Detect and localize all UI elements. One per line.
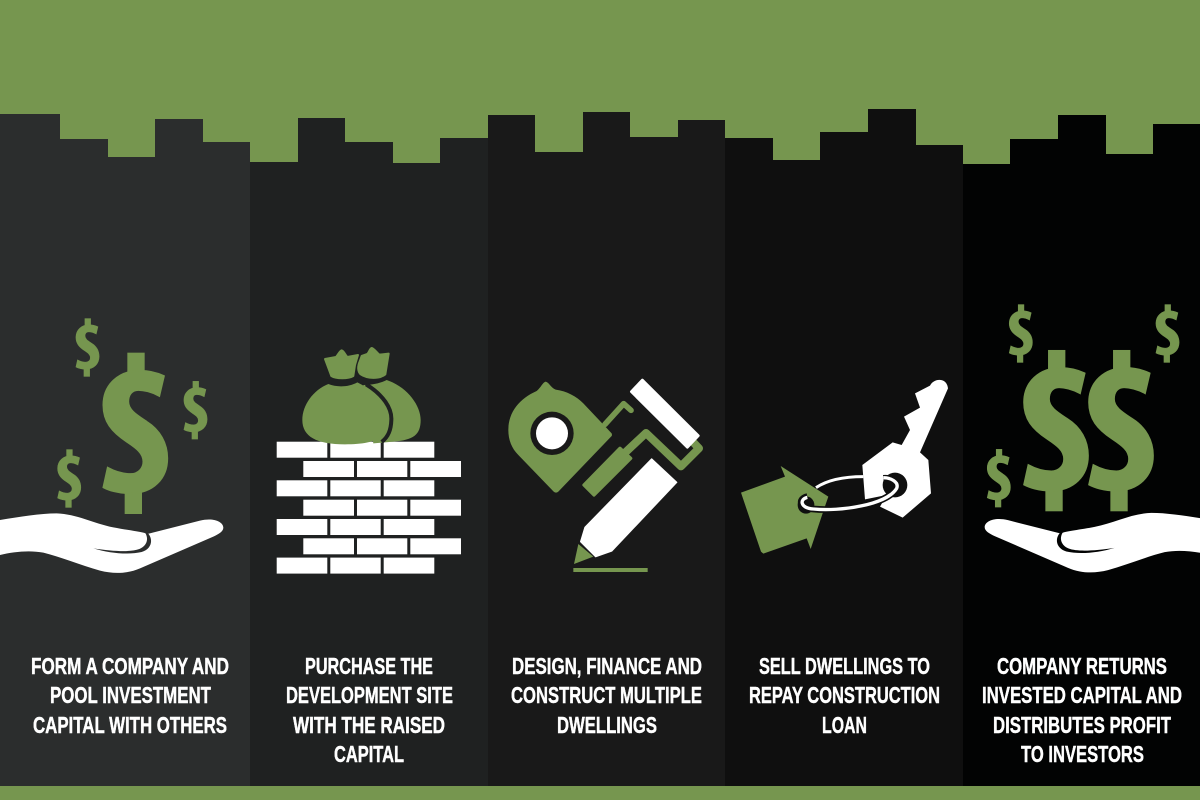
skyline column 4: [725, 109, 963, 800]
caption: step 1: [31, 653, 229, 738]
panel: step 5 return capital: [963, 115, 1200, 800]
caption: step 3: DWELLINGS: [557, 712, 657, 738]
skyline column 1: [0, 114, 250, 800]
caption: step 5: TO INVESTORS: [1021, 741, 1144, 767]
bottom green band: [0, 786, 1200, 800]
icon: tape measure, roller and pencil: [508, 380, 699, 572]
caption: step 2: DEVELOPMENT SITE: [286, 682, 453, 708]
panel: step 4 sell dwellings: [725, 109, 963, 800]
caption: step 2: CAPITAL: [334, 741, 404, 767]
icon: double dollars over open hand: [985, 304, 1200, 572]
caption: step 3: CONSTRUCT MULTIPLE: [511, 682, 702, 708]
skyline column 3: [488, 112, 725, 800]
caption: step 4: REPAY CONSTRUCTION: [749, 682, 940, 708]
caption: step 2: PURCHASE THE: [305, 653, 433, 679]
panel: step 2 purchase site: [250, 118, 488, 800]
caption: step 1: FORM A COMPANY AND: [31, 653, 229, 679]
icon: house key fob and key: [741, 380, 948, 554]
icon: money bags: [302, 348, 421, 444]
caption: step 4: LOAN: [822, 712, 867, 738]
caption: step 1: POOL INVESTMENT: [50, 682, 211, 708]
skyline column 5: [963, 115, 1200, 800]
caption: step 5: [982, 653, 1182, 767]
icon: brick wall: [277, 442, 461, 574]
caption: step 2: WITH THE RAISED: [293, 712, 445, 738]
paint roller: [584, 380, 699, 495]
icon: dollars over open hand: [0, 318, 223, 573]
caption: step 1: CAPITAL WITH OTHERS: [33, 712, 227, 738]
caption: step 3: [511, 653, 702, 738]
pencil: [573, 459, 677, 572]
caption: step 2: [286, 653, 453, 767]
caption: step 4: SELL DWELLINGS TO: [759, 653, 930, 679]
panel: step 1 form a company: [0, 114, 250, 800]
caption: step 3: DESIGN, FINANCE AND: [512, 653, 702, 679]
panel: step 3 design and construct: [488, 112, 725, 800]
caption: step 4: [749, 653, 940, 738]
skyline column 2: [250, 118, 488, 800]
tape measure: [508, 382, 631, 493]
